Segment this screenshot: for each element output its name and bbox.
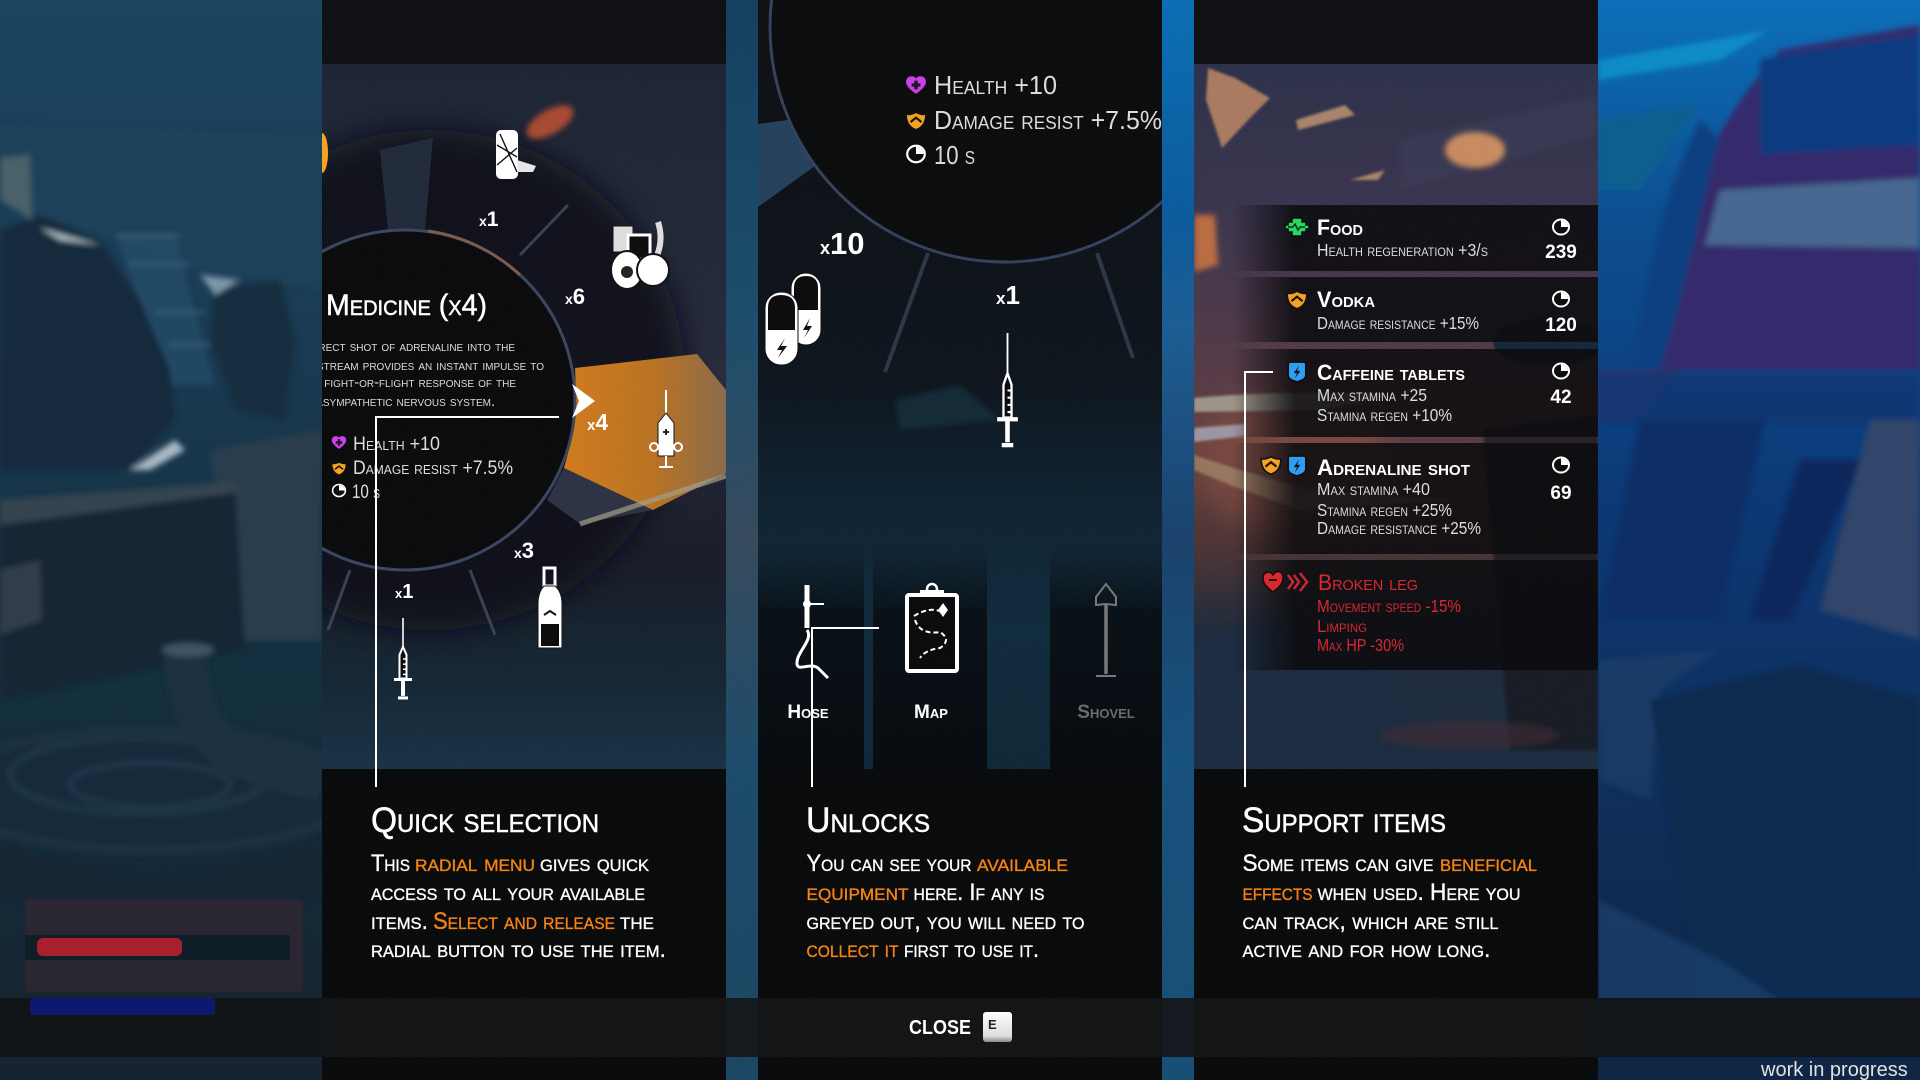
scene: fire and debris — [1190, 68, 1603, 769]
background: right scene — [1598, 0, 1920, 1080]
count x6: x6 — [565, 284, 585, 309]
disc stats: 10 s — [352, 482, 380, 503]
disc heading: Medicine (x4) — [326, 289, 487, 322]
disc stats — [906, 70, 1162, 170]
disc description: Direct shot of adrenaline into the — [305, 339, 515, 355]
row: broken leg: Limping — [1317, 616, 1367, 636]
label: map: Map — [914, 702, 948, 723]
disc stats: Health +10 — [353, 434, 440, 455]
partially visible left icon — [322, 133, 328, 173]
caption heading: Unlocks — [806, 801, 930, 840]
disc stats: Damage resist +7.5% — [934, 105, 1162, 135]
top gap wedge — [380, 138, 433, 230]
wedge: lower right highlight — [547, 468, 653, 524]
close button: CLOSE — [909, 1017, 971, 1039]
disc stats — [332, 436, 512, 498]
caption body — [1242, 850, 1537, 963]
radial wedge top left — [758, 120, 815, 207]
fire glow — [522, 101, 578, 143]
close button: E — [988, 1017, 997, 1032]
row: broken leg: Movement speed -15% — [1317, 596, 1461, 616]
icon: bandage — [496, 130, 536, 179]
caption body: This — [371, 850, 410, 877]
icon: food — [611, 222, 669, 289]
disc stats: 10 s — [934, 140, 975, 170]
count x3: x3 — [514, 538, 534, 563]
spokes — [885, 253, 1133, 372]
bottom caption — [1194, 769, 1598, 1080]
label: hose: Hose — [787, 702, 829, 723]
center disc — [322, 228, 576, 572]
row: food: 239 — [1545, 242, 1577, 263]
caption body: radial button to use the item. — [371, 936, 666, 963]
caption body: Select and release — [433, 908, 615, 935]
row: adrenaline shot: Adrenaline shot — [1317, 455, 1470, 480]
caption body: gives quick — [540, 850, 650, 877]
icon: shovel — [1096, 584, 1116, 676]
caption body: equipment — [806, 879, 908, 906]
caption body: when used. Here you — [1318, 879, 1520, 906]
caption body: first to use it. — [904, 936, 1039, 963]
leader line — [376, 417, 559, 787]
leader line — [1245, 372, 1273, 787]
row: food: Food — [1317, 215, 1363, 240]
icon: syringe — [394, 618, 412, 698]
disc description: the fight-or-flight response of the — [300, 375, 516, 391]
caption body: collect it — [806, 936, 898, 963]
row: adrenaline shot: Stamina regen +25% — [1317, 500, 1452, 520]
caption heading: Quick selection — [371, 801, 599, 840]
caption body: available — [977, 850, 1068, 877]
icon: syringe — [997, 333, 1018, 445]
selection arrow — [572, 384, 595, 418]
label: shovel: Shovel — [1077, 702, 1135, 723]
caption heading: Support items — [1242, 801, 1446, 840]
caption body: can track, which are still — [1242, 908, 1498, 935]
caption body: effects — [1242, 879, 1312, 906]
caption body: radial menu — [415, 850, 535, 877]
caption body: beneficial — [1440, 850, 1537, 877]
count x1: x1 — [479, 208, 499, 231]
disc description: bloodstream provides an instant impulse to — [282, 358, 544, 374]
rocks — [895, 385, 1000, 430]
panel: quick selection — [322, 64, 726, 958]
icon: hose — [797, 585, 828, 678]
wedge: selected orange sector — [564, 354, 726, 510]
row: caffeine tablets — [1232, 349, 1598, 437]
row: adrenaline shot — [1232, 443, 1598, 554]
caption body: You can see your — [806, 850, 972, 877]
caption body: here. If any is — [914, 879, 1044, 906]
caption body: access to all your available — [371, 879, 645, 906]
count x1: x1 — [996, 280, 1020, 310]
panel: unlocks — [758, 0, 1240, 1080]
background: left scene — [0, 0, 322, 1080]
count x1 lower: x1 — [395, 581, 413, 603]
disc description — [322, 344, 544, 406]
row: caffeine tablets: Stamina regen +10% — [1317, 405, 1452, 425]
film grain — [322, 0, 1598, 1080]
row: adrenaline shot: 69 — [1550, 483, 1572, 504]
center disc — [770, 0, 1240, 262]
bottom caption — [758, 769, 1162, 1080]
row: food: Health regeneration +3/s — [1317, 240, 1488, 260]
disc description: parasympathetic nervous system. — [296, 394, 495, 410]
row: broken leg: Broken leg — [1318, 570, 1418, 595]
decorative close band — [0, 998, 1920, 1057]
caption body — [371, 850, 666, 963]
row: adrenaline shot: Damage resistance +25% — [1317, 518, 1481, 538]
item columns — [758, 545, 1162, 769]
bottom caption — [322, 769, 726, 1080]
row: vodka — [1232, 277, 1598, 342]
count x10: x10 — [820, 226, 864, 261]
caption body: Some items can give — [1242, 850, 1434, 877]
row: broken leg: Max HP -30% — [1317, 635, 1404, 655]
close button — [909, 1012, 1012, 1042]
row: vodka: Damage resistance +15% — [1317, 313, 1479, 333]
panel: support items — [1190, 0, 1603, 1080]
caption body: active and for how long. — [1242, 936, 1490, 963]
caption body — [806, 850, 1084, 963]
row: broken leg — [1232, 560, 1598, 670]
caption body: the — [620, 908, 654, 935]
row: caffeine tablets: Max stamina +25 — [1317, 385, 1427, 405]
icon: pills — [765, 273, 821, 365]
caption body: greyed out, you will need to — [806, 908, 1084, 935]
row: food — [1232, 205, 1598, 271]
radial menu dark ring — [322, 118, 697, 642]
row: caffeine tablets: 42 — [1550, 387, 1572, 408]
count x4: x4 — [587, 409, 608, 435]
row: adrenaline shot: Max stamina +40 — [1317, 479, 1430, 499]
row: vodka: 120 — [1545, 315, 1577, 336]
icon: vodka bottle — [538, 568, 562, 648]
caption body: items. — [371, 908, 428, 935]
disc stats: Damage resist +7.5% — [353, 458, 513, 479]
row: caffeine tablets: Caffeine tablets — [1317, 360, 1465, 385]
row: vodka: Vodka — [1317, 287, 1375, 312]
icon: medical syringe — [650, 390, 682, 467]
icon: map clipboard — [907, 584, 957, 671]
disc stats: Health +10 — [934, 70, 1057, 100]
background: strips between panels — [726, 0, 1194, 1080]
leader line — [812, 628, 879, 787]
